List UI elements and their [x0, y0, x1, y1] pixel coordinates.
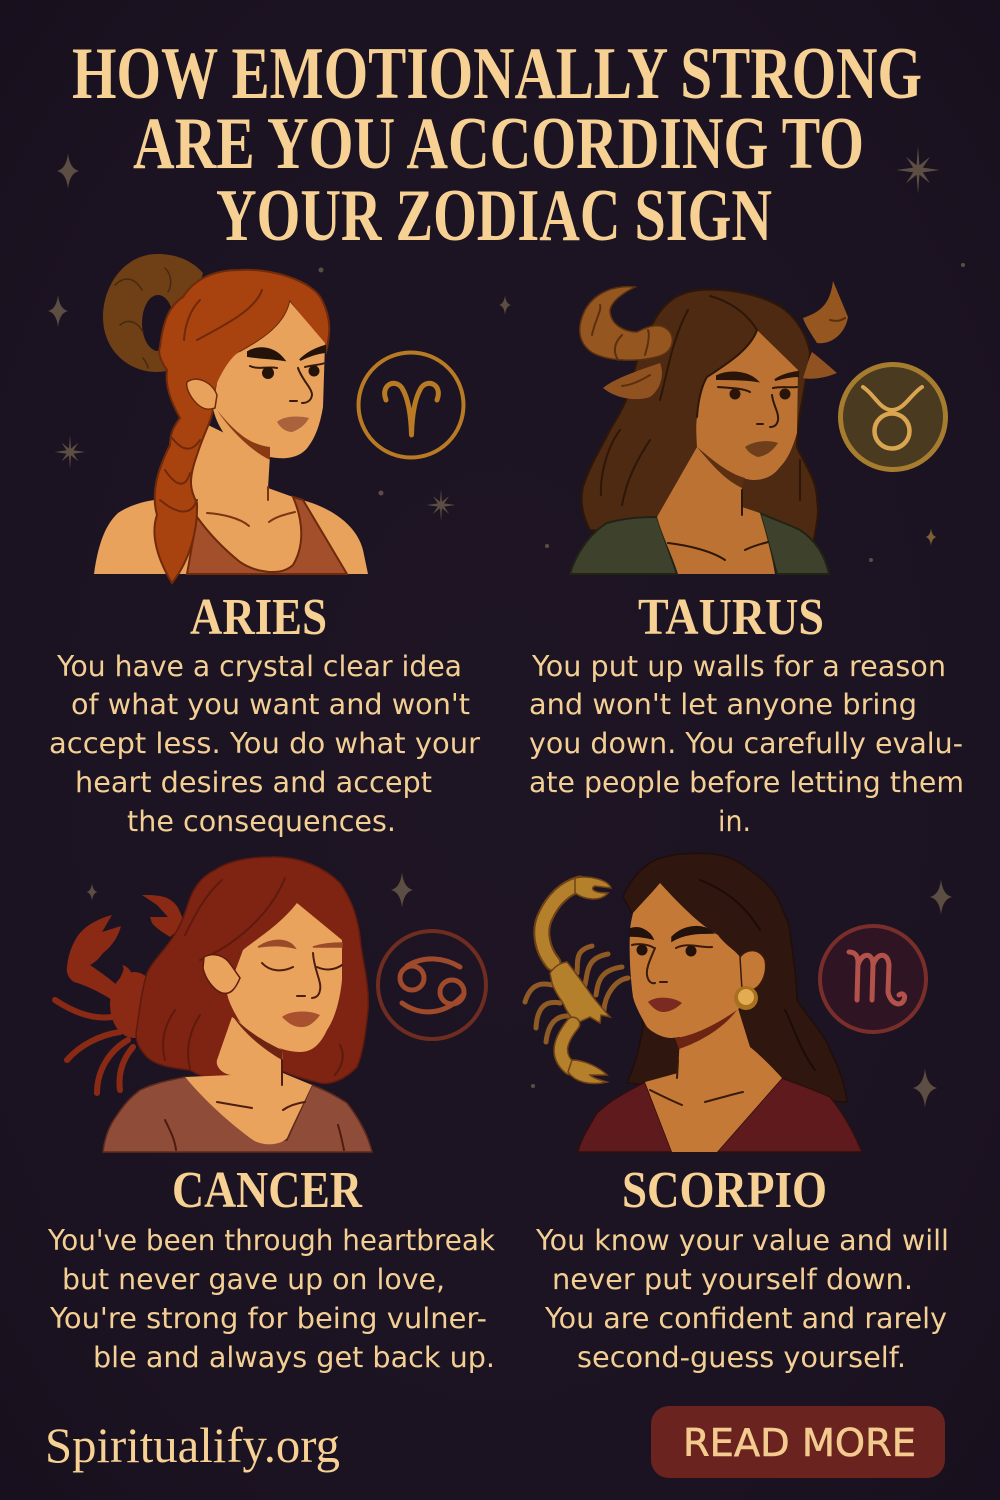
- description: cancer: ble and always get back up.: [93, 1341, 495, 1374]
- panel: aries: [49, 254, 480, 838]
- description: cancer: but never gave up on love,: [62, 1263, 445, 1296]
- description: cancer: [47, 1224, 495, 1374]
- illustration: scorpio woman with scorpion: [525, 853, 862, 1152]
- description: taurus: [529, 650, 964, 838]
- description: taurus: ate people before letting them: [529, 766, 964, 799]
- description: aries: You have a crystal clear idea: [56, 650, 462, 683]
- heading: aries: ARIES: [190, 589, 327, 646]
- icon: scorpio sign: [820, 926, 926, 1032]
- description: cancer: You've been through heartbreak: [47, 1224, 495, 1257]
- description: aries: [49, 650, 480, 838]
- icon: taurus sign: [840, 364, 946, 470]
- description: aries: accept less. You do what your: [49, 727, 480, 760]
- description: cancer: You're strong for being vulner-: [49, 1302, 487, 1335]
- panel: scorpio: [525, 853, 949, 1374]
- heading: cancer: CANCER: [172, 1162, 363, 1219]
- icon: aries sign: [358, 352, 464, 458]
- title: [72, 33, 922, 257]
- heading: taurus: TAURUS: [638, 589, 824, 646]
- title: YOUR ZODIAC SIGN: [216, 175, 772, 257]
- description: taurus: You put up walls for a reason: [531, 650, 946, 683]
- illustration: aries woman with ram horn: [94, 254, 368, 583]
- description: scorpio: second-guess yourself.: [577, 1341, 906, 1374]
- read more button: READ MORE: [683, 1421, 916, 1465]
- footer brand: Spiritualify.org: [45, 1417, 340, 1473]
- description: taurus: in.: [718, 805, 751, 838]
- description: scorpio: You know your value and will: [535, 1224, 949, 1257]
- description: scorpio: never put yourself down.: [552, 1263, 913, 1296]
- description: aries: of what you want and won't: [71, 688, 470, 721]
- decorative stars: [48, 146, 965, 1107]
- description: taurus: you down. You carefully evalu-: [529, 727, 963, 760]
- description: taurus: and won't let anyone bring: [529, 688, 917, 721]
- icon: cancer sign: [378, 931, 486, 1039]
- description: scorpio: You are confident and rarely: [544, 1302, 947, 1335]
- heading: scorpio: SCORPIO: [622, 1162, 827, 1219]
- description: aries: heart desires and accept: [75, 766, 432, 799]
- illustration: taurus woman with bull horns: [570, 281, 848, 574]
- description: scorpio: [535, 1224, 949, 1374]
- panel: taurus: [529, 281, 964, 838]
- illustration: cancer woman with crab: [55, 857, 372, 1152]
- description: aries: the consequences.: [127, 805, 396, 838]
- read more button: [651, 1406, 945, 1478]
- panel: cancer: [47, 857, 495, 1374]
